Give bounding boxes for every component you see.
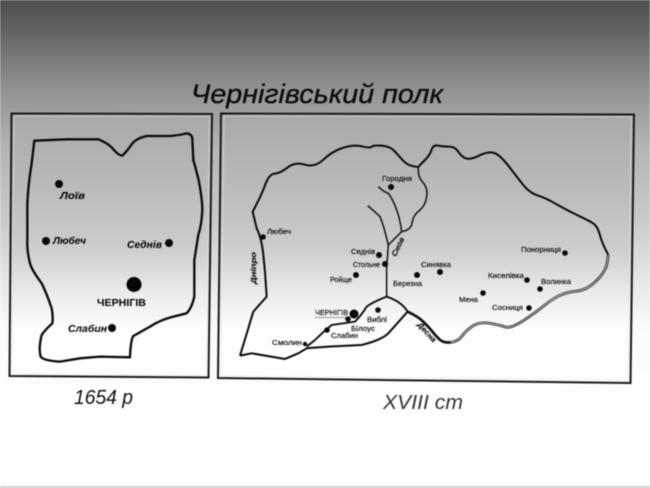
label: Седнів bbox=[127, 239, 173, 251]
label: Любеч: Любеч bbox=[267, 227, 291, 236]
label: Білоус bbox=[345, 316, 375, 333]
label: Чернігів bbox=[97, 277, 146, 309]
label: Киселівка bbox=[488, 271, 530, 283]
caption: 18th century: XVIII ст bbox=[382, 392, 463, 414]
label: Чернігів: ЧЕРНІГІВ bbox=[315, 308, 348, 317]
label: Волинка bbox=[537, 277, 572, 292]
label: Понорниця: Понорниця bbox=[521, 245, 561, 254]
caption: 1654: 1654 р bbox=[74, 387, 133, 409]
label: Мена: Мена bbox=[459, 295, 479, 304]
label: Понорниця bbox=[521, 245, 568, 256]
label: Слабин bbox=[324, 327, 358, 340]
panel: map 18th century bbox=[218, 114, 634, 383]
label: Снов: Снов bbox=[390, 236, 406, 258]
label: Дніпро: Дніпро bbox=[249, 252, 258, 285]
label: Виблі: Виблі bbox=[367, 315, 387, 324]
label: Седнів bbox=[351, 247, 382, 258]
regiment border bbox=[240, 145, 608, 359]
label: Седнів: Седнів bbox=[127, 240, 162, 251]
label: Березна: Березна bbox=[393, 279, 423, 288]
label: Синявка bbox=[421, 260, 452, 275]
river: Desna bbox=[408, 255, 608, 342]
label: Слабин: Слабин bbox=[331, 331, 358, 340]
label: Десна: Десна bbox=[415, 320, 438, 344]
regiment border bbox=[27, 133, 202, 362]
label: Чернігів: ЧЕРНІГІВ bbox=[97, 298, 146, 309]
label: Слабин: Слабин bbox=[68, 323, 107, 335]
label: Любеч bbox=[42, 235, 86, 247]
title: Чернігівський полк bbox=[191, 79, 444, 109]
label: Білоус: Білоус bbox=[351, 324, 375, 333]
label: Любеч bbox=[260, 227, 291, 240]
label: Синявка: Синявка bbox=[421, 260, 452, 269]
panel frame bbox=[218, 114, 634, 383]
label: Волинка: Волинка bbox=[541, 277, 572, 286]
label: Стольне: Стольне bbox=[353, 260, 380, 269]
label: Чернігів bbox=[315, 308, 358, 318]
label: Любеч: Любеч bbox=[52, 235, 86, 247]
label: Лоїв bbox=[55, 180, 85, 202]
southern branch border bbox=[307, 297, 408, 347]
panel frame bbox=[10, 114, 212, 378]
rivers: Snov and tributaries bbox=[368, 167, 427, 297]
label: Седнів: Седнів bbox=[351, 247, 375, 256]
label: Киселівка: Киселівка bbox=[488, 271, 525, 280]
label: Березна bbox=[393, 272, 423, 288]
label: Виблі bbox=[367, 307, 387, 324]
label: Сосниця: Сосниця bbox=[492, 303, 523, 312]
label: Смолин: Смолин bbox=[272, 338, 302, 347]
label: Лоїв: Лоїв bbox=[59, 191, 85, 202]
label: Городня bbox=[382, 174, 412, 190]
label: Мена bbox=[459, 290, 486, 304]
label: Ройще: Ройще bbox=[330, 275, 352, 284]
label: Ройще bbox=[330, 272, 359, 284]
label: Городня: Городня bbox=[382, 174, 412, 183]
panel: map 1654 bbox=[10, 114, 212, 378]
